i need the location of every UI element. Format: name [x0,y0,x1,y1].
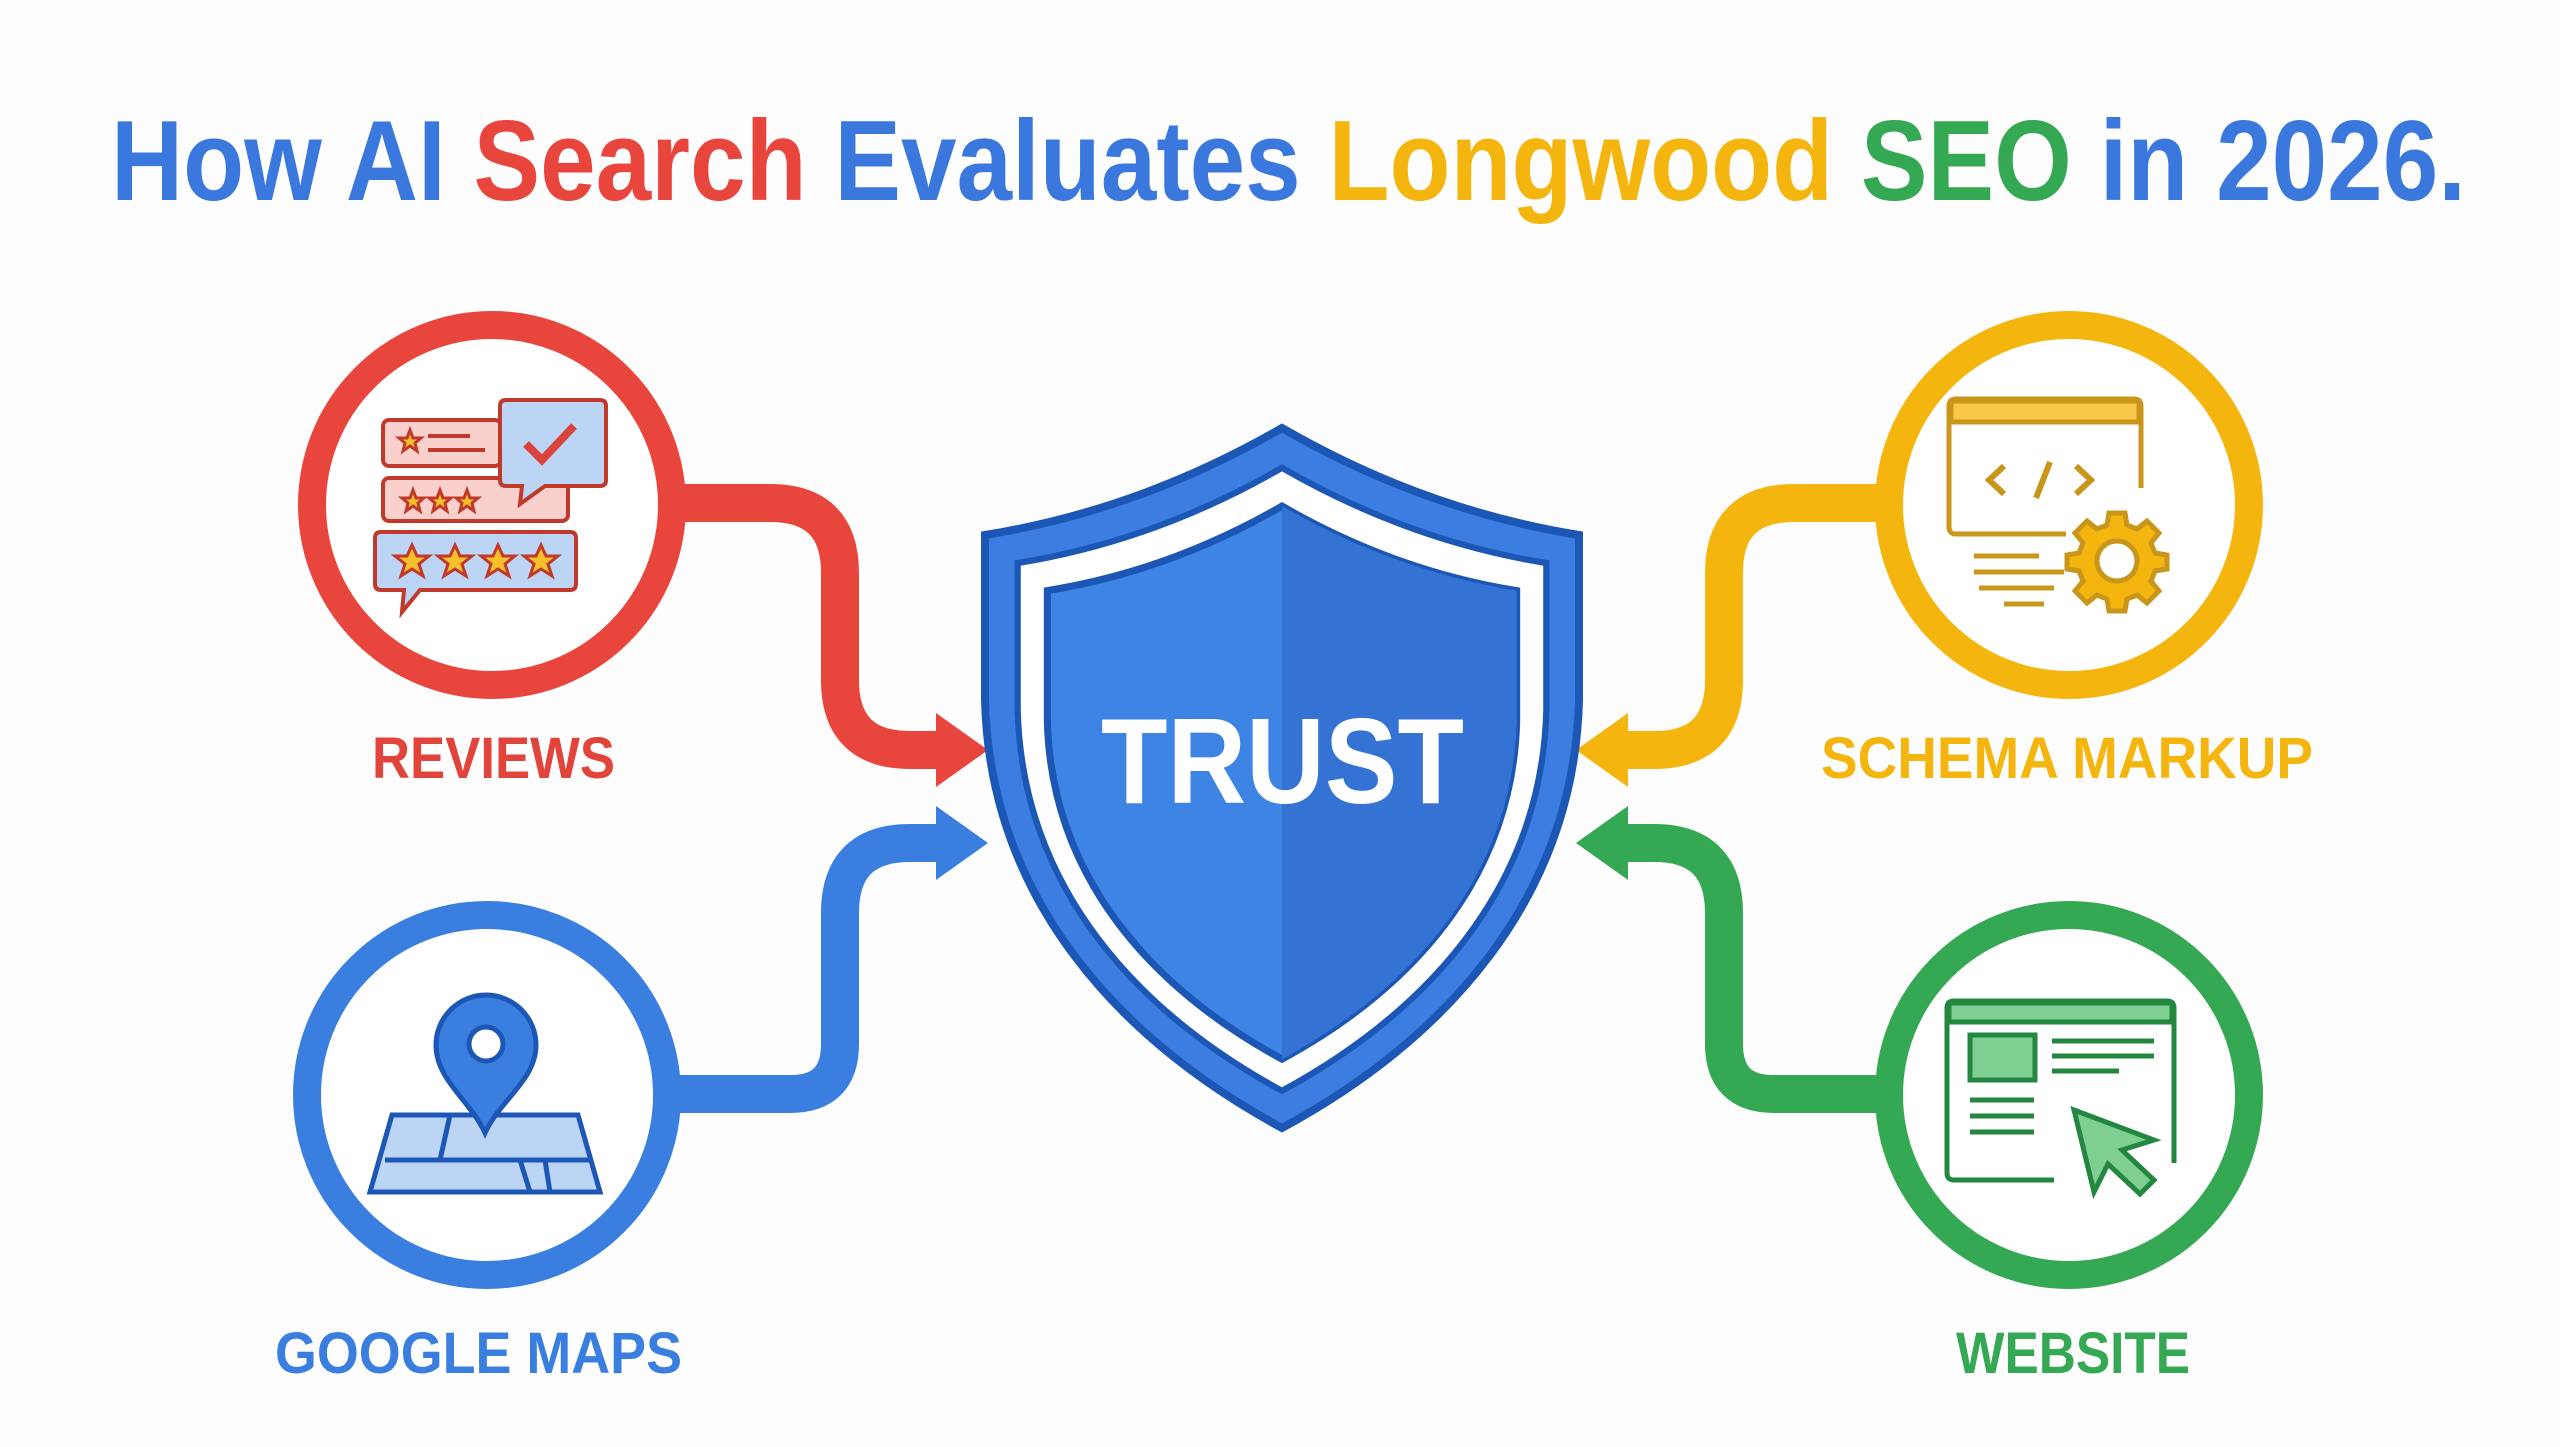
panel: website [1889,915,2249,1386]
icon: map pin [370,995,600,1192]
arrow: reviews to trust [680,503,988,787]
label: website: WEBSITE [1956,1321,2190,1386]
arrow: schema markup to trust [1576,503,1884,787]
label: google maps: GOOGLE MAPS [275,1321,682,1386]
label: schema markup: SCHEMA MARKUP [1821,726,2313,791]
icon: reviews [375,400,606,612]
title: How AI Search Evaluates Longwood SEO in 2026. [111,98,2466,225]
panel: google maps [275,915,682,1386]
arrow: google maps to trust [672,806,988,1094]
icon: browser with cursor [1947,1001,2174,1194]
shield label: TRUST [1101,693,1464,829]
icon: code window with gear [1949,399,2167,611]
panel: schema markup [1821,325,2313,791]
shield: trust [985,428,1579,1128]
arrow: website to trust [1576,806,1886,1094]
label: reviews: REVIEWS [372,726,615,791]
panel: reviews [312,325,672,791]
